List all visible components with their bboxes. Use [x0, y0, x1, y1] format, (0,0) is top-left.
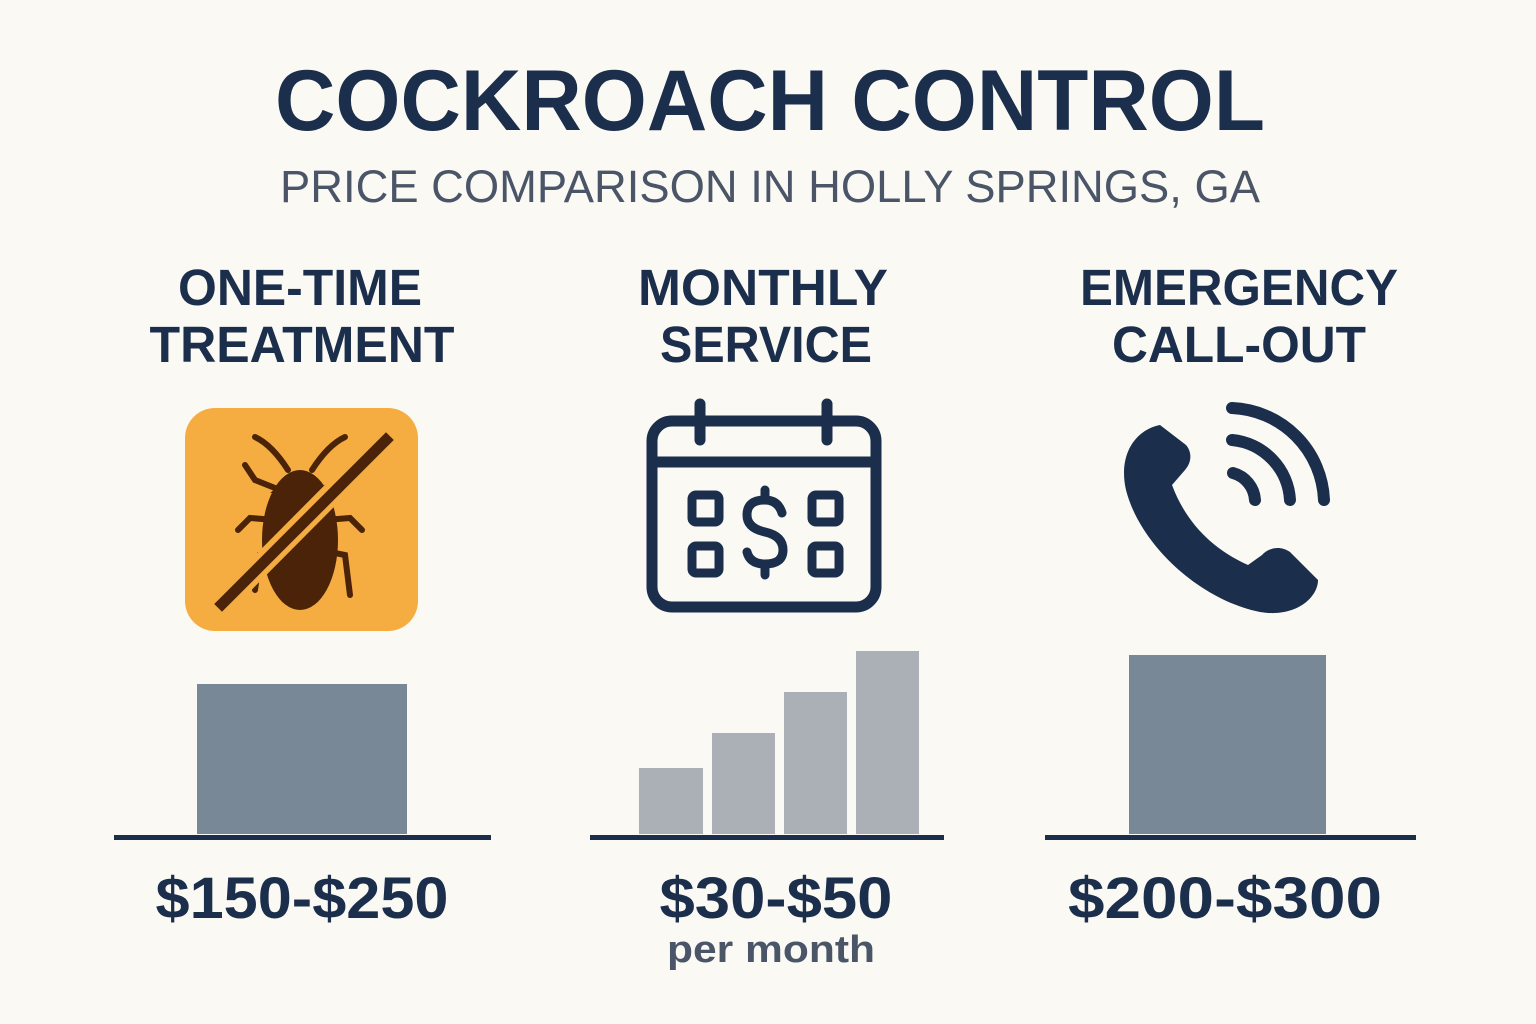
heading: one-time treatment [150, 259, 454, 373]
heading: emergency call-out: EMERGENCY [1080, 259, 1398, 316]
price: one-time: $150-$250 [156, 866, 448, 931]
heading: monthly service [638, 259, 888, 373]
bar chart: monthly [590, 651, 944, 840]
title: COCKROACH CONTROL [275, 53, 1265, 149]
heading: one-time treatment: TREATMENT [150, 316, 454, 373]
price: monthly: $30-$50 [660, 866, 892, 931]
heading: emergency call-out [1080, 259, 1398, 373]
heading: monthly service: MONTHLY [638, 259, 888, 316]
price: monthly [660, 866, 892, 971]
icon: calendar with dollar [652, 404, 876, 607]
heading: monthly service: SERVICE [660, 316, 872, 373]
icon: phone with signal [1124, 408, 1324, 613]
subtitle: PRICE COMPARISON IN HOLLY SPRINGS, GA [280, 161, 1260, 212]
price: monthly: per month [667, 929, 875, 971]
price: emergency: $200-$300 [1068, 866, 1382, 931]
bar chart: one-time [114, 684, 491, 840]
icon: no cockroach [185, 408, 418, 631]
bar chart: emergency [1045, 655, 1416, 840]
heading: emergency call-out: CALL-OUT [1112, 316, 1366, 373]
heading: one-time treatment: ONE-TIME [178, 259, 422, 316]
